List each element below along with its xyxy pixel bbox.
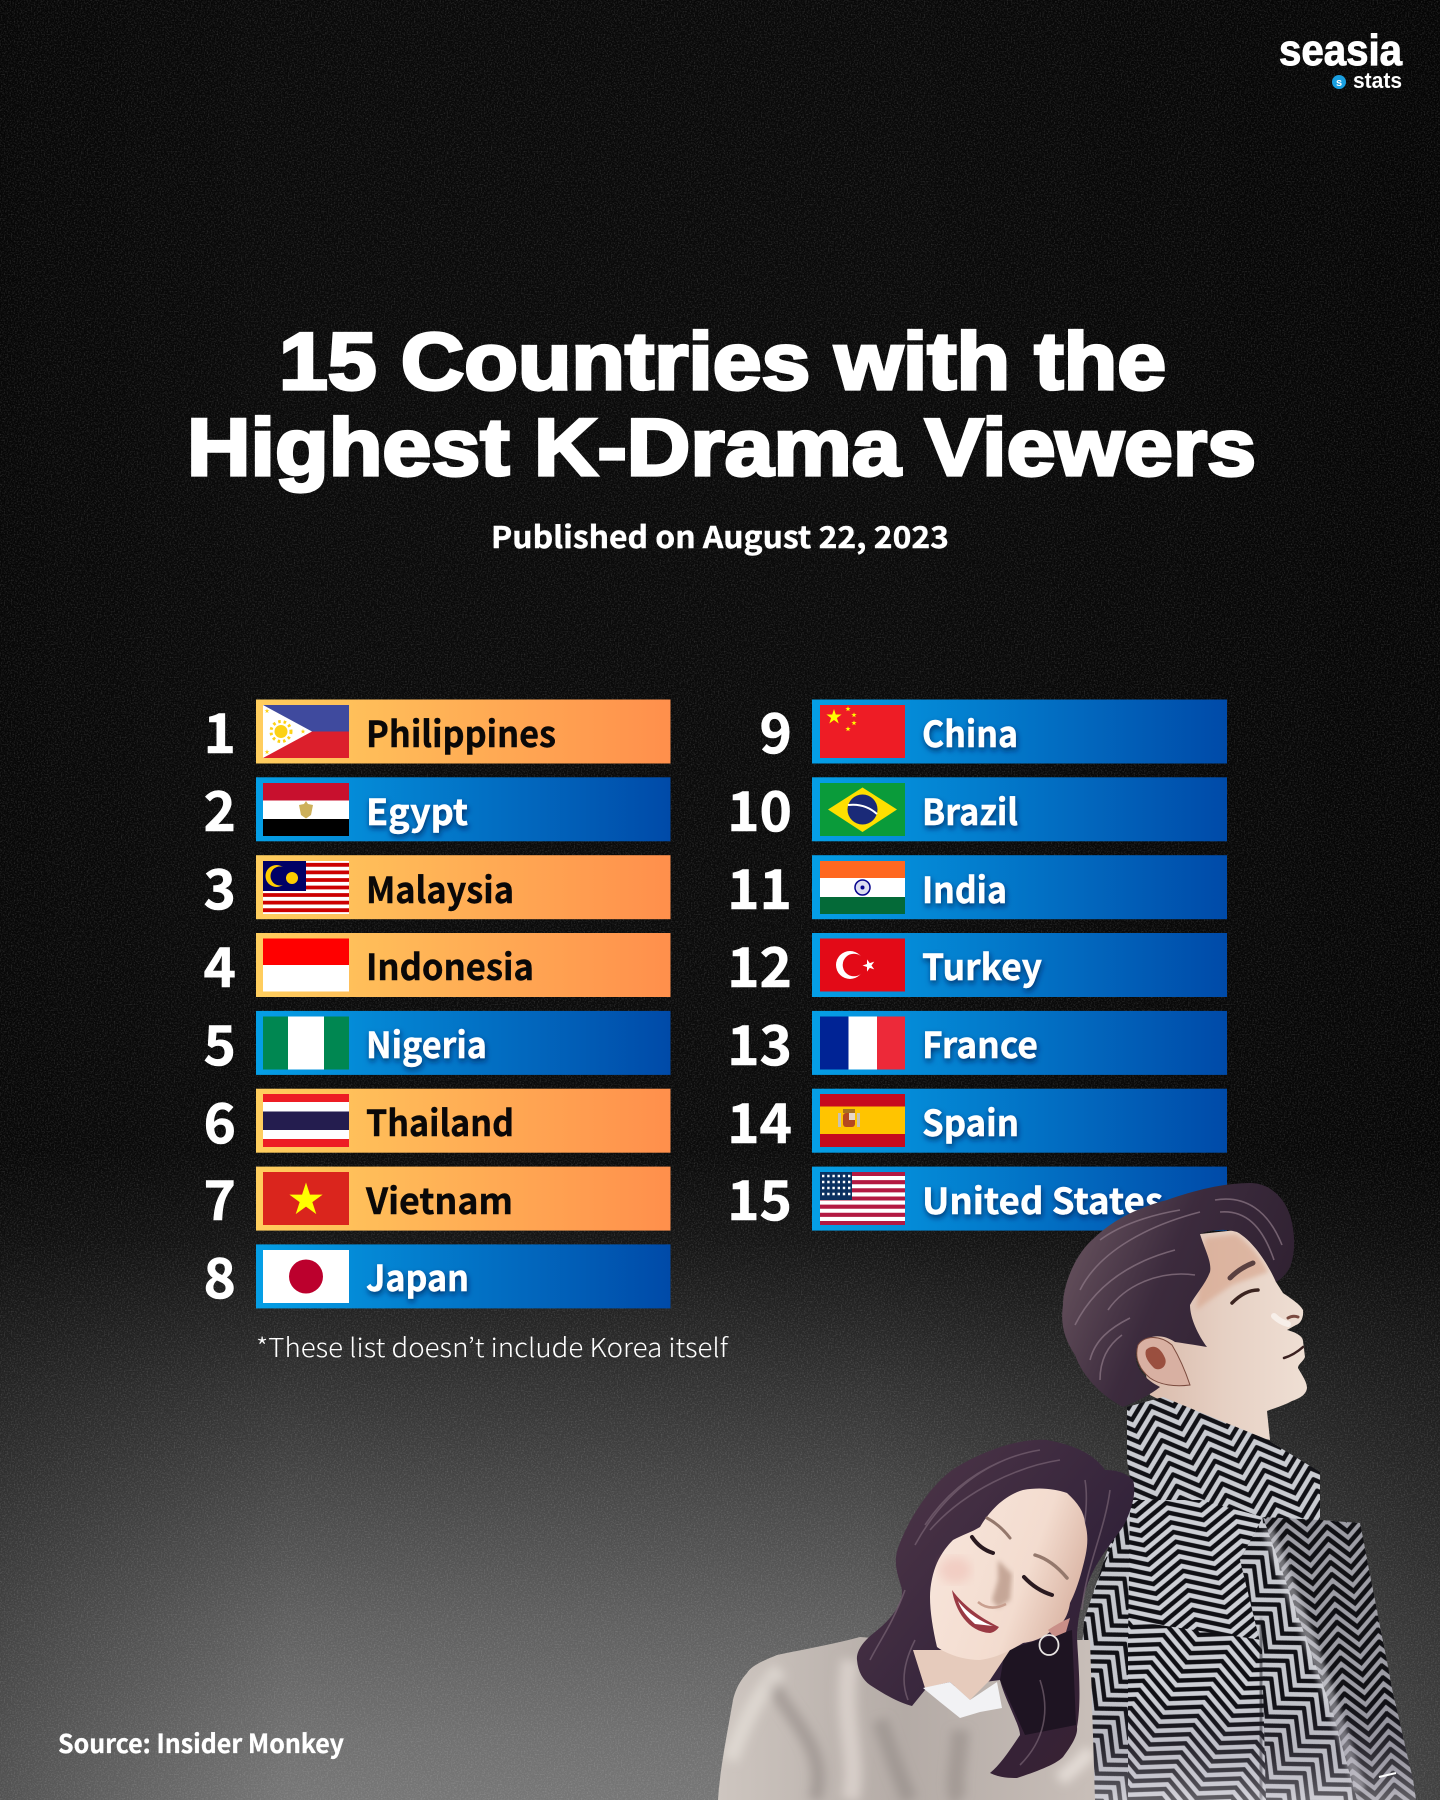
rank 1: Philippines: 1: [204, 689, 236, 769]
flag: France: [820, 1016, 905, 1070]
rank 10: Brazil: Brazil: [922, 784, 1018, 836]
woman's neck: [913, 1650, 1010, 1700]
coat shoulder patch: [1125, 1500, 1263, 1650]
rank 15: United States: 15: [727, 1156, 792, 1236]
rank 12: Turkey: [727, 923, 1227, 1003]
rank 5: Nigeria: [204, 1001, 670, 1081]
rank 1: Philippines: [204, 689, 670, 769]
rank 9: China: [760, 689, 1227, 769]
man's face and neck: [1140, 1230, 1307, 1440]
rank 5: Nigeria: Nigeria: [366, 1017, 487, 1069]
rank 5: Nigeria: 5: [204, 1001, 236, 1081]
rank 11: India: [727, 845, 1227, 925]
title: 15 Countries with the: [279, 317, 1166, 407]
rank 6: Thailand: Thailand: [366, 1095, 514, 1147]
rank 7: Vietnam: Vietnam: [365, 1173, 513, 1225]
woman's cheek blush: [939, 1557, 971, 1583]
flag: Philippines: [263, 705, 349, 758]
rank 3: Malaysia: [204, 845, 670, 925]
woman's nose: [978, 1602, 1006, 1608]
man's hair strands: [1075, 1199, 1282, 1380]
rank 7: Vietnam: [204, 1156, 670, 1236]
footnote: *These list doesn’t include Korea itself: [256, 1328, 729, 1365]
rank 12: Turkey: 12: [727, 923, 792, 1003]
rank 4: Indonesia: [204, 923, 670, 1003]
rank 4: Indonesia: 4: [204, 923, 236, 1003]
flag: Indonesia: [263, 938, 349, 992]
man's facial features: [1230, 1263, 1303, 1358]
subtitle: Published on August 22, 2023: [491, 513, 949, 557]
rank 9: China: China: [922, 706, 1018, 758]
woman's hair strands: [870, 1450, 1110, 1765]
coat collar: [1082, 1397, 1416, 1800]
rank 3: Malaysia: 3: [204, 845, 236, 925]
woman's nose shadow: [992, 1560, 1012, 1608]
logo: seasia stats: [1279, 26, 1402, 93]
woman's sweater: [710, 1630, 1100, 1800]
woman's face: [930, 1489, 1087, 1660]
rank 15: United States: [727, 1156, 1227, 1236]
rank 12: Turkey: Turkey: [922, 939, 1042, 991]
man's forehead tone: [1196, 1234, 1268, 1310]
flag: Nigeria: [263, 1016, 349, 1070]
woman's collar: [923, 1682, 1002, 1718]
rank 10: Brazil: [727, 767, 1227, 847]
rank 8: Japan: [204, 1234, 670, 1314]
flag: Spain: [820, 1094, 905, 1147]
logo: seasia stats: seasia: [1279, 26, 1402, 75]
flag: United States: [820, 1172, 905, 1225]
coat back panel: [1263, 1517, 1420, 1800]
rank 9: China: 9: [760, 689, 792, 769]
rank 11: India: 11: [727, 845, 792, 925]
flag: Vietnam: [263, 1172, 349, 1225]
man's ear: [1137, 1338, 1190, 1386]
woman's smile: [952, 1590, 999, 1633]
man's hair: [1062, 1183, 1294, 1407]
rank 4: Indonesia: Indonesia: [366, 939, 534, 991]
rank 13: France: [727, 1001, 1227, 1081]
illustration: woman: [710, 1440, 1134, 1800]
rank 8: Japan: 8: [204, 1234, 236, 1314]
rank 6: Thailand: 6: [204, 1079, 236, 1159]
rank 3: Malaysia: Malaysia: [366, 862, 514, 914]
woman's eyes and brows: [972, 1518, 1067, 1595]
man's coat: [1082, 1397, 1416, 1800]
rank 10: Brazil: 10: [727, 767, 792, 847]
flag: Egypt: [263, 783, 349, 836]
rank 6: Thailand: [204, 1079, 670, 1159]
rank 15: United States: United States: [922, 1173, 1163, 1225]
coat sleeve: [1240, 1517, 1357, 1800]
flag: Malaysia: [263, 861, 349, 914]
rank 11: India: India: [922, 862, 1007, 914]
rank 13: France: France: [922, 1017, 1038, 1069]
rank 2: Egypt: Egypt: [366, 784, 468, 836]
source: Source: Insider Monkey: [58, 1724, 344, 1761]
flag: India: [820, 861, 905, 914]
woman's ear: [1048, 1618, 1070, 1637]
rank 1: Philippines: Philippines: [366, 706, 556, 758]
coat left strip: [1080, 1500, 1130, 1800]
woman's teeth: [958, 1601, 993, 1626]
title: [187, 317, 1256, 493]
rank 8: Japan: Japan: [366, 1250, 469, 1302]
woman's hair: [857, 1440, 1134, 1778]
logo: seasia stats: stats: [1353, 68, 1402, 93]
woman's earring: [1040, 1635, 1058, 1655]
coat chest patch: [1125, 1620, 1266, 1800]
rank 14: Spain: Spain: [922, 1095, 1019, 1147]
rank 13: France: 13: [727, 1001, 792, 1081]
rank 2: Egypt: [204, 767, 670, 847]
rank 2: Egypt: 2: [204, 767, 236, 847]
coat highlights: [1268, 1530, 1360, 1790]
flag: Brazil: [820, 783, 905, 836]
flag: China: [820, 705, 905, 758]
flag: Thailand: [263, 1094, 349, 1147]
logo: seasia stats: s: [1336, 77, 1342, 89]
illustration: man with herringbone coat: [710, 1183, 1440, 1800]
rank 7: Vietnam: 7: [204, 1156, 236, 1236]
flag: Turkey: [820, 938, 905, 992]
woman's dark under-hair: [1000, 1630, 1076, 1735]
title: Highest K-Drama Viewers: [187, 403, 1256, 493]
flag: Japan: [263, 1250, 349, 1303]
rank 14: Spain: [727, 1079, 1227, 1159]
coat white mark: [1379, 1773, 1396, 1777]
rank 14: Spain: 14: [727, 1079, 792, 1159]
